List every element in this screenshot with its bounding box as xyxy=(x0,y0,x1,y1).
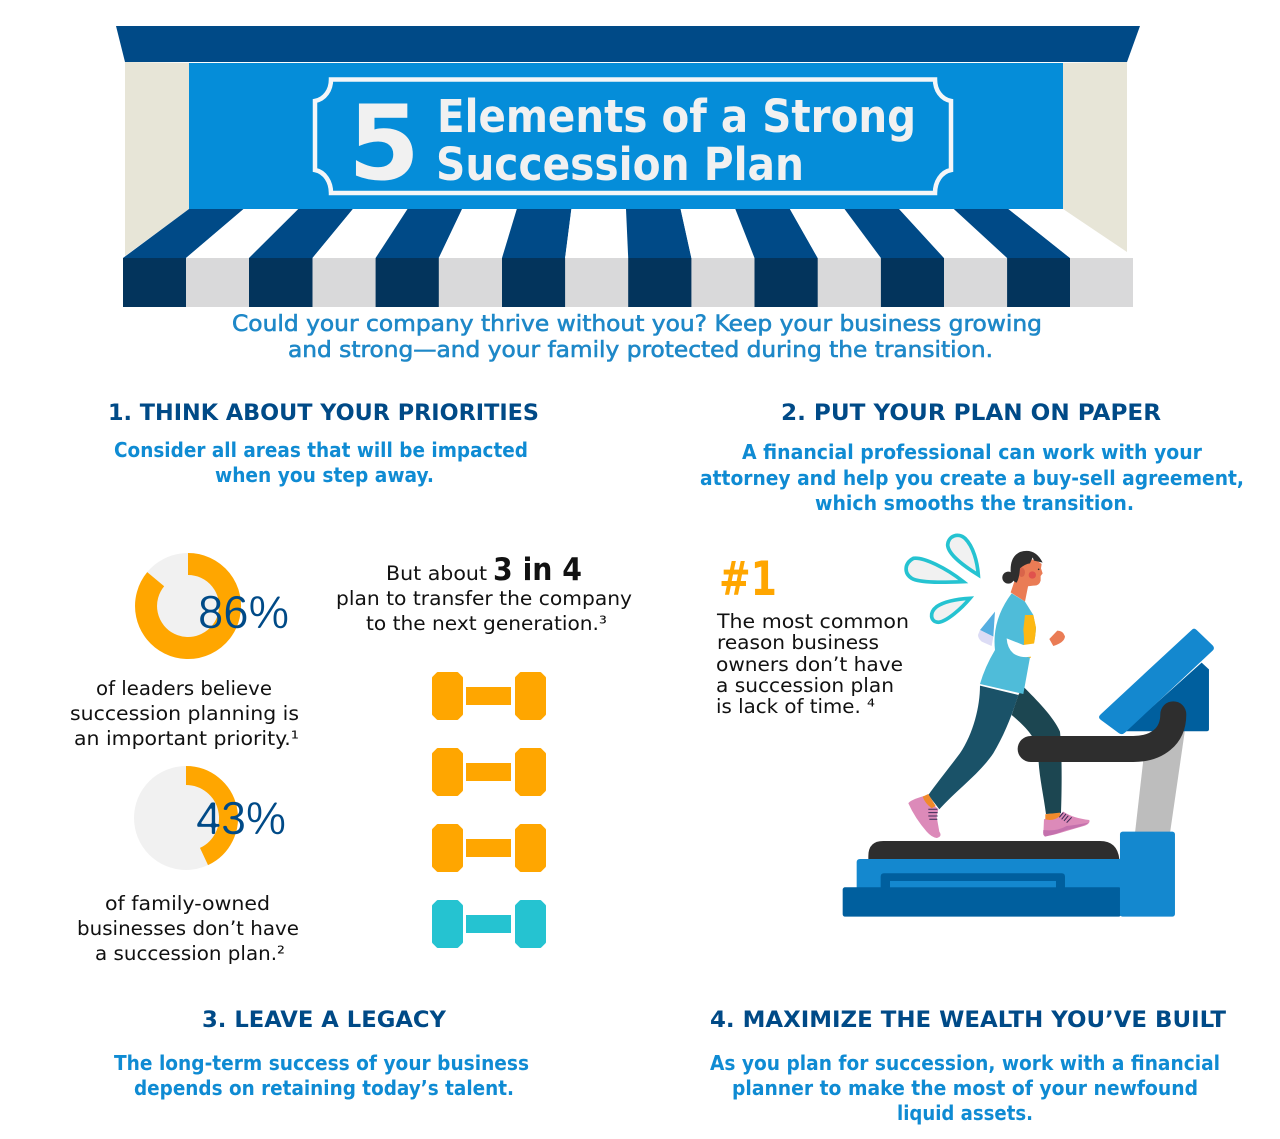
forearm xyxy=(1007,637,1053,657)
section 4 subhead xyxy=(710,1051,1220,1125)
section 2 subhead: attorney and help you create a buy-sell agreement, xyxy=(700,466,1244,490)
hair bun xyxy=(1002,572,1014,584)
storefront awning banner xyxy=(116,26,1140,307)
title: Elements of a Strong xyxy=(437,90,916,143)
back arm xyxy=(980,612,995,637)
face xyxy=(1016,559,1043,587)
title plaque outline xyxy=(315,80,951,193)
heading 1: 1. THINK ABOUT YOUR PRIORITIES xyxy=(108,401,539,426)
text: 3 in 4 statistic xyxy=(336,552,632,635)
text: 86% caption: succession planning is xyxy=(70,702,299,725)
donut chart 43% xyxy=(134,766,286,870)
icon: dumbbell 1 xyxy=(434,674,544,718)
#1 callout number: #1 xyxy=(719,552,777,607)
roof band xyxy=(116,26,1140,62)
treadmill post xyxy=(1135,730,1185,833)
treadmill console screen xyxy=(1099,629,1214,734)
text: lack of time callout: reason business xyxy=(717,631,879,654)
right shoe xyxy=(1043,812,1090,837)
treadmill handle xyxy=(1031,714,1173,749)
section 3 subhead xyxy=(114,1051,529,1100)
section 1 subhead: when you step away. xyxy=(215,463,434,487)
donut chart 86% xyxy=(135,553,289,659)
intro subtitle: Could your company thrive without you? Keep your business growing xyxy=(232,312,1042,337)
section 3 subhead: depends on retaining today’s talent. xyxy=(134,1076,514,1100)
section 4 subhead: liquid assets. xyxy=(897,1101,1033,1125)
text: 43% caption: a succession plan.² xyxy=(95,942,285,965)
donut chart 43%: 43% xyxy=(196,792,286,844)
title: Succession Plan xyxy=(436,138,804,191)
text: 86% caption xyxy=(70,677,299,750)
text: lack of time callout: is lack of time. ⁴ xyxy=(716,695,875,718)
hair xyxy=(1011,551,1043,583)
icon: sweat drops xyxy=(906,535,978,622)
text: 86% caption: an important priority.¹ xyxy=(74,727,299,750)
back sleeve xyxy=(978,630,993,646)
section 4 subhead: As you plan for succession, work with a financial xyxy=(710,1051,1220,1075)
icon: dumbbell 4 teal xyxy=(434,902,544,946)
heading 4: 4. MAXIMIZE THE WEALTH YOU’VE BUILT xyxy=(710,1008,1226,1033)
donut chart 86%: 86% xyxy=(198,586,289,638)
text: 3 in 4 statistic: But about xyxy=(386,562,487,585)
runner figure xyxy=(908,551,1090,838)
awning canopy stripes xyxy=(123,209,1133,258)
intro subtitle: and strong—and your family protected during the transition. xyxy=(288,338,993,363)
illustration: runner on treadmill xyxy=(843,535,1214,917)
icon: dumbbell 3 xyxy=(434,826,544,870)
text: lack of time callout: a succession plan xyxy=(716,674,894,697)
section 2 subhead xyxy=(700,440,1244,515)
upper body xyxy=(978,551,1065,694)
awning valance xyxy=(123,258,1133,307)
title: 5 xyxy=(348,84,420,204)
text: 43% caption: businesses don’t have xyxy=(77,917,299,940)
section 1 subhead: Consider all areas that will be impacted xyxy=(114,438,528,462)
neck xyxy=(1011,577,1028,602)
section 1 subhead xyxy=(114,438,528,487)
title xyxy=(348,84,916,204)
left shoe xyxy=(908,794,941,838)
section 2 subhead: A financial professional can work with your xyxy=(742,440,1202,464)
yellow shirt panel xyxy=(1023,615,1036,658)
text: lack of time callout xyxy=(716,610,909,718)
icon: dumbbell row xyxy=(434,674,544,946)
text: lack of time callout: owners don’t have xyxy=(716,653,903,676)
text: 86% caption: of leaders believe xyxy=(96,677,272,700)
heading 2: 2. PUT YOUR PLAN ON PAPER xyxy=(781,401,1161,426)
text: 43% caption xyxy=(77,892,299,965)
side wall left xyxy=(125,62,189,256)
text: 3 in 4 statistic: plan to transfer the company xyxy=(336,587,632,610)
text: 43% caption: of family-owned xyxy=(105,892,270,915)
text: lack of time callout: The most common xyxy=(716,610,909,633)
torso shirt xyxy=(980,593,1036,694)
treadmill console back xyxy=(1125,663,1209,731)
near leg xyxy=(928,686,1018,809)
section 3 subhead: The long-term success of your business xyxy=(114,1051,529,1075)
eye xyxy=(1038,568,1039,570)
blue sign board xyxy=(189,63,1063,209)
side wall right xyxy=(1063,62,1127,252)
ear xyxy=(1018,568,1025,577)
section 4 subhead: planner to make the most of your newfound xyxy=(732,1076,1198,1100)
cheek xyxy=(1029,571,1036,579)
intro subtitle xyxy=(232,312,1042,363)
far leg xyxy=(1012,687,1062,814)
icon: dumbbell 2 xyxy=(434,750,544,794)
heading 3: 3. LEAVE A LEGACY xyxy=(202,1008,447,1033)
section 2 subhead: which smooths the transition. xyxy=(815,491,1134,515)
hand xyxy=(1049,631,1065,646)
text: 3 in 4 statistic: to the next generation.³ xyxy=(366,612,607,635)
text: 3 in 4 statistic: 3 in 4 xyxy=(493,552,582,588)
treadmill base xyxy=(843,832,1175,917)
